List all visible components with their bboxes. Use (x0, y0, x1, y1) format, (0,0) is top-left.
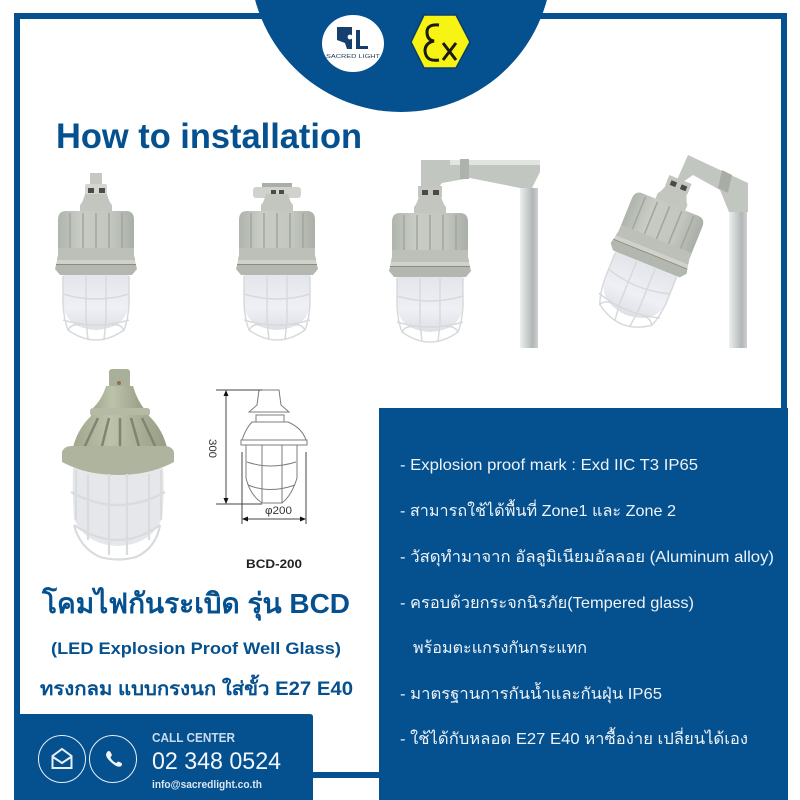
label: BCD-200: BCD-200 (246, 557, 302, 571)
icon: Ex hazard hexagon (411, 15, 470, 68)
heading: How to installation: How to installation (56, 117, 362, 156)
spec: guard cage: พร้อมตะแกรงกันกระแทก (413, 639, 587, 657)
spec: tempered glass: - ครอบด้วยกระจกนิรภัย(Tempered glass) (400, 594, 694, 612)
pole (729, 212, 747, 348)
product subtitle: (LED Explosion Proof Well Glass) (51, 639, 341, 658)
logo: Sacred Light: SACRED LIGHT (326, 54, 381, 60)
product title block (40, 586, 353, 700)
lamp 2: flat flange mount (236, 183, 318, 340)
product shape and socket: ทรงกลม แบบกรงนก ใส่ขั้ว E27 E40 (40, 674, 353, 700)
dimension drawing BCD-200 (206, 390, 307, 571)
spec: explosion proof mark: - Explosion proof mark : Exd IIC T3 IP65 (400, 457, 698, 474)
lamp 1: top cap mount (55, 173, 137, 340)
icon: envelope (38, 736, 86, 782)
icon: phone (90, 736, 136, 782)
spec: bulb socket: - ใช้ได้กับหลอด E27 E40 หาซื้อง่าย เปลี่ยนได้เอง (400, 727, 748, 748)
label: φ200: φ200 (265, 505, 292, 517)
spec: material: - วัสดุทำมาจาก อัลลูมิเนียมอัลลอย (Aluminum alloy) (400, 548, 774, 567)
panel: specifications (379, 408, 788, 800)
phone number: 02 348 0524 (152, 748, 281, 775)
arm (421, 160, 540, 188)
label: 300: 300 (206, 439, 218, 458)
spec: zones: - สามารถใช้ได้พื้นที่ Zone1 และ Zone 2 (400, 499, 676, 520)
arm (677, 155, 748, 212)
label: call center: CALL CENTER (152, 731, 235, 745)
logo: Sacred Light (322, 15, 384, 72)
product name: โคมไฟกันระเบิด รุ่น BCD (41, 586, 350, 621)
lamp: green product photo (62, 369, 174, 560)
email: info@sacredlight.co.th (152, 779, 262, 791)
lamp 3: wall arm with pole (389, 159, 540, 348)
spec: IP rating: - มาตรฐานการกันน้ำและกันฝุ่น IP65 (400, 682, 662, 704)
lamp 4: angled arm with pole (584, 155, 748, 348)
panel: contact (14, 714, 313, 800)
pole (520, 188, 538, 348)
top blue badge (250, 0, 552, 112)
